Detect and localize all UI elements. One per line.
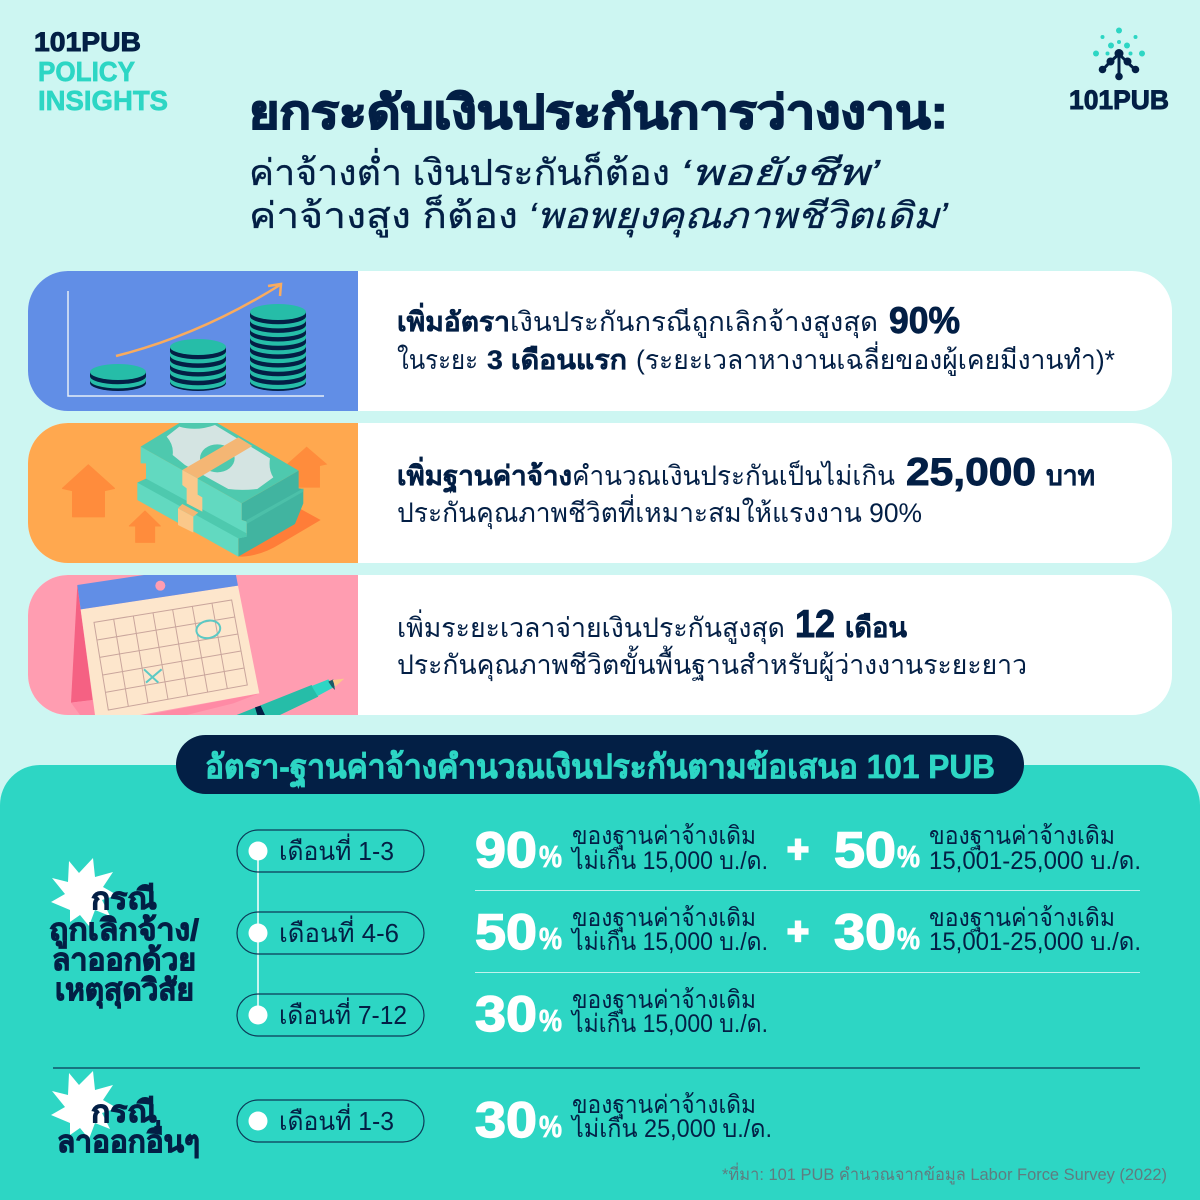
panel: extend payment duration: [28, 575, 1172, 715]
icon: calendar and pen: [28, 575, 358, 715]
label: other resignation: ลาออกอื่นๆ: [57, 1120, 200, 1159]
subtitle: ‘พอยังชีพ’: [680, 152, 881, 193]
row: months 1-3 rates: ของฐานค่าจ้างเดิม: [572, 822, 756, 850]
panel: raise replacement rate: [28, 271, 1172, 411]
row: months 4-6 rates: 50: [475, 904, 537, 960]
text: extend duration: [397, 603, 1027, 682]
brand: 101PUB Policy Insights: [34, 27, 168, 116]
text: raise wage base: บาท: [1046, 460, 1095, 491]
text: raise rate: 3 เดือนแรก: [487, 345, 627, 375]
row: months 4-6 rates: %: [897, 921, 920, 956]
pill: other resignation month 1-3: [237, 1100, 424, 1142]
subtitle: [249, 148, 949, 238]
row: months 1-3 rates: 50: [834, 822, 896, 878]
row: months 4-6 rates: [475, 904, 1141, 960]
row: months 7-12 rate: %: [539, 1003, 562, 1038]
pill: month 7-12: [237, 994, 424, 1036]
row: months 1-3 rates: 90: [475, 822, 537, 878]
row: months 4-6 rates: 30: [834, 904, 896, 960]
text: raise wage base: 25,000: [906, 451, 1036, 494]
pill: month 4-6: [237, 912, 424, 954]
row: months 7-12 rate: ของฐานค่าจ้างเดิม: [572, 986, 756, 1014]
label: dismissal or force majeure: ถูกเลิกจ้าง/: [49, 914, 200, 949]
source note: *ที่มา: 101 PUB คำนวณจากข้อมูล Labor Force Survey (2022): [722, 1162, 1167, 1185]
panel: proposed rates: [0, 765, 1200, 1200]
row: months 1-3 rates: %: [539, 839, 562, 874]
timeline line: [257, 851, 259, 1015]
text: extend duration: เดือน: [845, 612, 907, 643]
row: months 4-6 rates: ของฐานค่าจ้างเดิม: [572, 904, 756, 932]
row: months 7-12 rate: 30: [475, 986, 537, 1042]
row: months 4-6 rates: ของฐานค่าจ้างเดิม: [929, 904, 1115, 932]
row: other resignation rate: [475, 1091, 772, 1148]
heading pill: proposed rates: อัตรา-ฐานค่าจ้างคำนวณเงินประกันตามข้อเสนอ 101 PUB: [205, 748, 995, 788]
row: months 4-6 rates: ไม่เกิน 15,000 บ./ด.: [570, 927, 768, 956]
text: extend duration: ประกันคุณภาพชีวิตขั้นพื้นฐานสำหรับผู้ว่างงานระยะยาว: [397, 645, 1027, 682]
label: dismissal or force majeure: กรณี: [91, 883, 157, 916]
row: months 1-3 rates: 15,001-25,000 บ./ด.: [929, 847, 1141, 875]
row: months 7-12 rate: ไม่เกิน 15,000 บ./ด.: [570, 1009, 768, 1038]
pill: month 1-3: เดือนที่ 1-3: [279, 833, 394, 866]
row: other resignation rate: ของฐานค่าจ้างเดิม: [572, 1091, 756, 1119]
panel: raise wage base: [28, 423, 1172, 563]
pill: month 7-12: เดือนที่ 7-12: [279, 997, 407, 1030]
text: extend duration: 12: [795, 603, 835, 646]
subtitle: ค่าจ้างต่ำ เงินประกันก็ต้อง: [249, 148, 670, 193]
label: other resignation: [51, 1071, 200, 1159]
row: other resignation rate: 30: [475, 1092, 537, 1148]
title: ยกระดับเงินประกันการว่างงาน:: [249, 86, 948, 138]
heading pill: proposed rates: [176, 735, 1024, 794]
row: months 4-6 rates: 15,001-25,000 บ./ด.: [929, 928, 1141, 956]
row: months 1-3 rates: ไม่เกิน 15,000 บ./ด.: [570, 846, 768, 875]
brand: 101PUB Policy Insights: POLICY: [38, 56, 135, 87]
pill: other resignation month 1-3: เดือนที่ 1-3: [279, 1103, 394, 1136]
pill: month 1-3: [237, 830, 424, 872]
row: other resignation rate: %: [539, 1109, 562, 1144]
text: extend duration: เพิ่มระยะเวลาจ่ายเงินประกันสูงสุด: [397, 609, 785, 645]
row: months 4-6 rates: %: [539, 921, 562, 956]
subtitle: ค่าจ้างสูง ก็ต้อง: [249, 193, 518, 238]
text: raise rate: เพิ่มอัตรา: [397, 302, 510, 337]
label: other resignation: กรณี: [91, 1096, 157, 1129]
text: raise rate: [397, 300, 1115, 376]
text: raise rate: ในระยะ: [397, 344, 478, 375]
row: months 1-3 rates: +: [787, 829, 809, 871]
row: months 4-6 rates: +: [787, 911, 809, 953]
row: months 1-3 rates: %: [897, 839, 920, 874]
text: raise wage base: คำนวณเงินประกันเป็นไม่เกิน: [572, 458, 895, 491]
text: raise rate: (ระยะเวลาหางานเฉลี่ยของผู้เคยมีงานทำ)*: [636, 341, 1115, 376]
logo: 101PUB: [1069, 28, 1169, 115]
subtitle: ‘พอพยุงคุณภาพชีวิตเดิม’: [528, 195, 949, 238]
row: months 1-3 rates: [475, 822, 1141, 878]
row: other resignation rate: ไม่เกิน 25,000 บ./ด.: [570, 1114, 772, 1143]
text: raise wage base: [397, 451, 1095, 530]
label: dismissal or force majeure: [49, 858, 200, 1009]
text: raise wage base: เพิ่มฐานค่าจ้าง: [397, 456, 572, 494]
text: raise rate: เงินประกันกรณีถูกเลิกจ้างสูงสุด: [510, 307, 878, 339]
text: raise rate: 90%: [889, 300, 960, 341]
row: months 1-3 rates: ของฐานค่าจ้างเดิม: [929, 822, 1115, 850]
label: dismissal or force majeure: ลาออกด้วย: [52, 944, 196, 977]
row: months 7-12 rate: [475, 986, 768, 1042]
label: dismissal or force majeure: เหตุสุดวิสัย: [55, 974, 194, 1009]
brand: 101PUB Policy Insights: 101PUB: [34, 27, 141, 57]
pill: month 4-6: เดือนที่ 4-6: [279, 915, 399, 948]
brand: 101PUB Policy Insights: INSIGHTS: [38, 85, 168, 116]
icon: growing coin stacks: [28, 271, 358, 411]
text: raise wage base: ประกันคุณภาพชีวิตที่เหมาะสมให้แรงงาน 90%: [397, 494, 922, 530]
logo: 101PUB: 101PUB: [1069, 85, 1169, 115]
icon: banknote stack with up arrows: [28, 423, 358, 563]
